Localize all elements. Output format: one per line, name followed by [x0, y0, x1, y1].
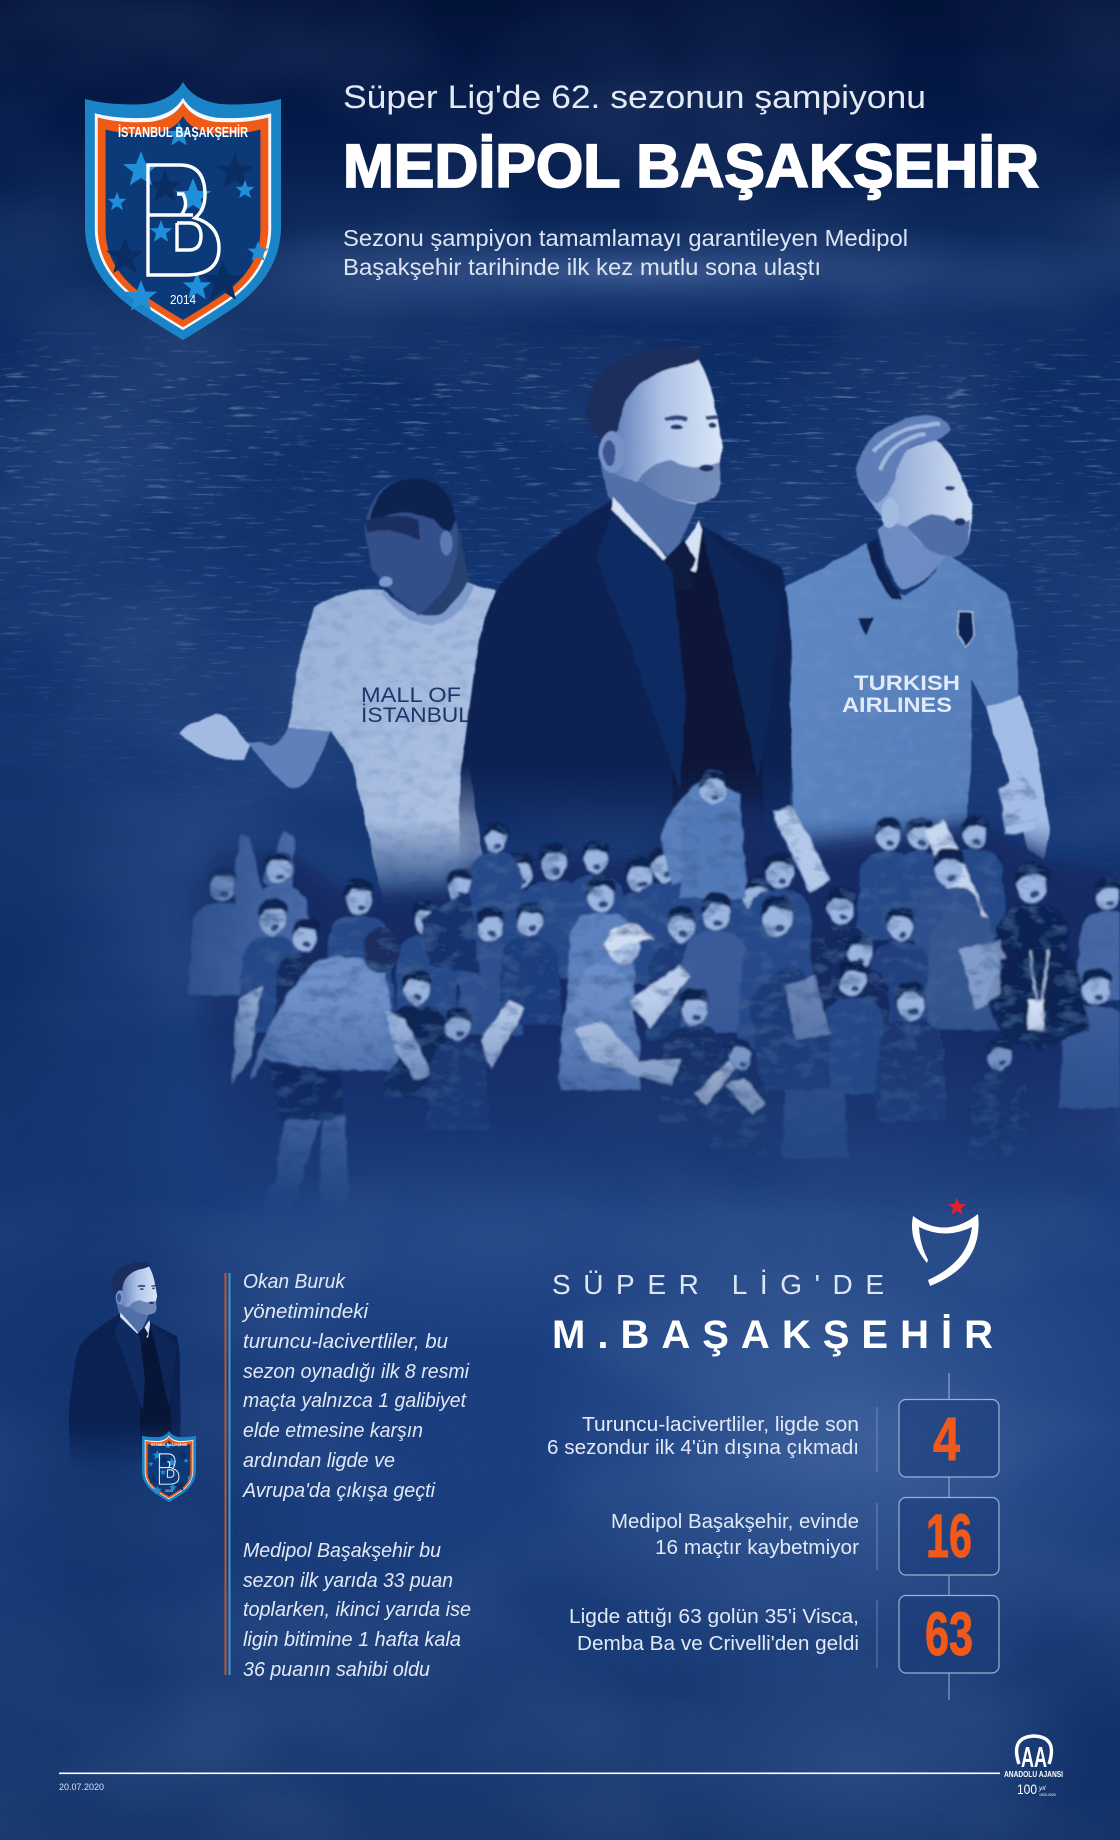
footer line [59, 1772, 1000, 1774]
coach narrative text: 36 puanın sahibi oldu [243, 1659, 430, 1681]
small coach portrait [69, 1262, 180, 1468]
section heading: M.Başakşehir: M.BAŞAKŞEHİR [552, 1313, 993, 1357]
icon: Anadolu Ajansı logo: yıl [1038, 1785, 1046, 1792]
jersey sponsor: İSTANBUL [361, 704, 471, 727]
small club crest: İSTANBUL BAŞAKŞEHİR [151, 1442, 187, 1447]
orange and blue vertical rule [224, 1273, 230, 1675]
jersey sponsor: AIRLINES [842, 694, 952, 717]
coach narrative text: ligin bitimine 1 hafta kala [243, 1629, 461, 1651]
jersey sponsor [842, 676, 958, 712]
stat row: 16 [611, 1498, 999, 1575]
photo: celebrating team crowd [188, 768, 1120, 1186]
icon: Anadolu Ajansı logo [1004, 1736, 1063, 1797]
coach narrative text: elde etmesine karşın [243, 1420, 423, 1442]
coach narrative text: maçta yalnızca 1 galibiyet [243, 1390, 467, 1412]
small club crest: 2014 [165, 1489, 173, 1493]
coach narrative text: sezon ilk yarıda 33 puan [243, 1570, 453, 1592]
coach narrative text: sezon oynadığı ilk 8 resmi [243, 1361, 470, 1383]
stat row: 63 [569, 1596, 999, 1673]
jersey sponsor [362, 688, 468, 722]
coach narrative text: Avrupa'da çıkışa geçti [242, 1480, 436, 1502]
jersey sponsor: MALL OF [361, 684, 461, 707]
stat row: 63: 63 [925, 1600, 973, 1668]
stat row: 16: 16 maçtır kaybetmiyor [655, 1537, 859, 1559]
coach narrative text: yönetimindeki [241, 1301, 369, 1323]
jersey sponsor: TURKISH [854, 672, 960, 695]
coach narrative text: toplarken, ikinci yarıda ise [243, 1599, 471, 1621]
intro text [343, 225, 908, 280]
photo: head coach [458, 346, 794, 854]
intro text: Sezonu şampiyon tamamlamayı garantileyen Medipol [343, 225, 908, 251]
stat row: 63: Demba Ba ve Crivelli'den geldi [577, 1633, 859, 1655]
club logo: Başakşehir crest: İSTANBUL BAŞAKŞEHİR [118, 124, 248, 141]
stat row: 63: Ligde attığı 63 golün 35'i Visca, [569, 1606, 859, 1628]
stat row: 4: 6 sezondur ilk 4'ün dışına çıkmadı [547, 1437, 859, 1459]
intro text: Başakşehir tarihinde ilk kez mutlu sona ulaştı [343, 254, 821, 280]
small club crest [142, 1431, 196, 1502]
stat row: 16: 16 [926, 1502, 972, 1570]
photo: right player [784, 415, 1050, 910]
coach narrative text: Medipol Başakşehir bu [243, 1540, 441, 1562]
photo: left player [179, 478, 495, 910]
club logo: Başakşehir crest: 2014 [170, 292, 196, 307]
icon: Süper Lig trophy logo [912, 1198, 979, 1286]
stat row: 4 [547, 1400, 999, 1477]
coach narrative text: Okan Buruk [243, 1271, 346, 1293]
coach narrative text: turuncu-lacivertliler, bu [243, 1331, 448, 1353]
stat row: 4: 4 [933, 1405, 960, 1473]
title: MEDİPOL BAŞAKŞEHİR [343, 132, 1039, 200]
icon: Anadolu Ajansı logo: ANADOLU AJANSI [1004, 1769, 1063, 1779]
coach narrative text: ardından ligde ve [243, 1450, 395, 1472]
icon: Anadolu Ajansı logo: 100 [1017, 1781, 1037, 1797]
footer date: 20.07.2020 [59, 1782, 104, 1793]
stat row: 4: Turuncu-lacivertliler, ligde son [582, 1414, 859, 1436]
subtitle: Süper Lig'de 62. sezonun şampiyonu [343, 79, 926, 115]
stat row: 16: Medipol Başakşehir, evinde [611, 1511, 859, 1533]
stats connector line [948, 1373, 950, 1700]
section heading: Süper Lig'de: SÜPER LİG'DE [552, 1269, 884, 1300]
icon: Anadolu Ajansı logo: 1920-2020 [1039, 1793, 1056, 1797]
club logo: Başakşehir crest [85, 82, 281, 340]
coach narrative text [241, 1271, 471, 1681]
icon: Anadolu Ajansı logo: AA [1021, 1742, 1047, 1774]
